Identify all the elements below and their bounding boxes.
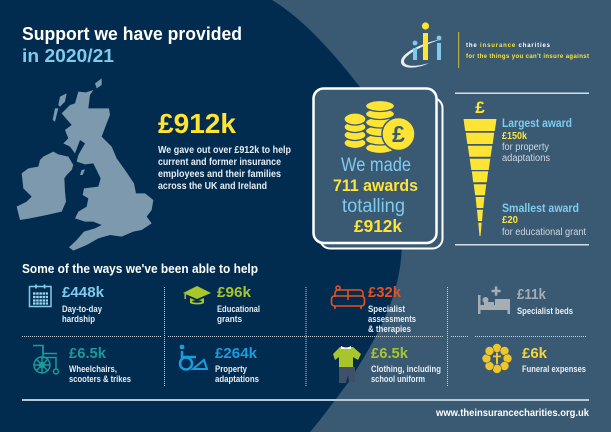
- awards text: 711 awards: [333, 176, 418, 195]
- largest award: Largest award: [502, 116, 572, 130]
- description: current and former insurance: [158, 156, 281, 168]
- title: [22, 23, 242, 66]
- item: clothing: school uniform: [371, 374, 425, 384]
- item: funeral expenses: [482, 344, 586, 374]
- item: day-to-day hardship: hardship: [62, 314, 95, 324]
- item: specialist assessments: assessments: [368, 314, 416, 324]
- item: specialist assessments: [332, 285, 416, 334]
- item: funeral expenses: Funeral expenses: [522, 364, 586, 374]
- icon: uniform: [333, 346, 361, 383]
- awards text: We made: [341, 155, 411, 176]
- item: clothing: Clothing, including: [371, 364, 441, 374]
- logo: the insurance charities: [466, 43, 551, 49]
- icon: wheelchair: [33, 346, 58, 374]
- item: specialist beds: Specialist beds: [517, 306, 573, 316]
- description: across the UK and Ireland: [158, 180, 267, 192]
- item: educational grants: [183, 285, 260, 324]
- smallest award: Smallest award: [502, 201, 579, 215]
- awards text: totalling: [342, 196, 405, 217]
- largest award: [502, 116, 572, 164]
- item: day-to-day hardship: [30, 284, 105, 324]
- icon: ramp wheelchair: [180, 345, 207, 370]
- logo: for the things you can't insure against: [466, 54, 589, 60]
- title: in 2020/21: [22, 45, 114, 66]
- item: wheelchairs: [33, 346, 131, 384]
- awards text: £912k: [354, 216, 402, 236]
- awards text: [333, 155, 418, 236]
- item: educational grants: £96k: [217, 285, 252, 301]
- largest award: for property: [502, 142, 549, 153]
- website url: www.theinsurancecharities.org.uk: [435, 407, 589, 419]
- icon: mortarboard: [183, 286, 211, 304]
- item: clothing: [333, 346, 441, 384]
- description: employees and their families: [158, 168, 281, 180]
- item: specialist assessments: £32k: [368, 285, 402, 301]
- item: specialist assessments: & therapies: [368, 324, 411, 334]
- item: specialist beds: [478, 286, 573, 316]
- icon: sofa: [332, 286, 364, 309]
- item: wheelchairs: £6.5k: [69, 346, 107, 362]
- smallest award: [502, 201, 586, 238]
- description: [158, 144, 291, 192]
- panel: award range: £: [475, 98, 485, 117]
- item: clothing: £6.5k: [371, 346, 409, 362]
- map: UK and Ireland: [17, 78, 153, 251]
- item: day-to-day hardship: Day-to-day: [62, 304, 102, 314]
- headline figure: £912k: [158, 108, 236, 139]
- item: educational grants: Educational: [217, 304, 260, 314]
- icon: coins: [344, 100, 415, 154]
- smallest award: for educational grant: [502, 227, 586, 238]
- panel: awards: £: [392, 121, 405, 147]
- icon: bed: [478, 286, 510, 314]
- heading: ways: Some of the ways we've been able to help: [22, 261, 258, 276]
- item: educational grants: grants: [217, 314, 242, 324]
- title: Support we have provided: [22, 23, 242, 44]
- item: wheelchairs: Wheelchairs,: [69, 364, 117, 374]
- item: wheelchairs: scooters & trikes: [69, 374, 131, 384]
- largest award: adaptations: [502, 153, 550, 164]
- item: specialist assessments: Specialist: [368, 304, 405, 314]
- item: property adaptations: [180, 345, 259, 384]
- panel: award range: [455, 92, 589, 246]
- logo: [401, 22, 589, 68]
- icon: calendar: [30, 284, 51, 306]
- item: property adaptations: Property: [215, 364, 247, 374]
- item: property adaptations: adaptations: [215, 374, 259, 384]
- item: specialist beds: £11k: [517, 287, 547, 303]
- description: We gave out over £912k to help: [158, 144, 291, 156]
- funnel chart: [464, 119, 496, 236]
- largest award: £150k: [502, 131, 527, 142]
- panel: awards: [314, 88, 442, 248]
- smallest award: £20: [502, 215, 518, 226]
- item: property adaptations: £264k: [215, 346, 258, 362]
- item: day-to-day hardship: £448k: [62, 285, 105, 301]
- headline figure: [158, 108, 291, 192]
- item: funeral expenses: £6k: [522, 346, 548, 362]
- icon: wreath: [482, 344, 512, 374]
